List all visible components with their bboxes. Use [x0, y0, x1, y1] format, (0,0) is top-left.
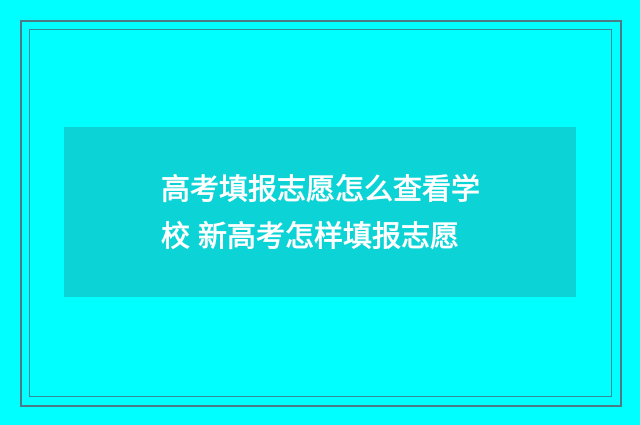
panel: title background	[64, 127, 576, 297]
title: 高考填报志愿怎么查看学	[161, 174, 480, 206]
title	[161, 174, 480, 253]
inner border frame	[29, 29, 612, 397]
title: 校 新高考怎样填报志愿	[161, 221, 459, 253]
